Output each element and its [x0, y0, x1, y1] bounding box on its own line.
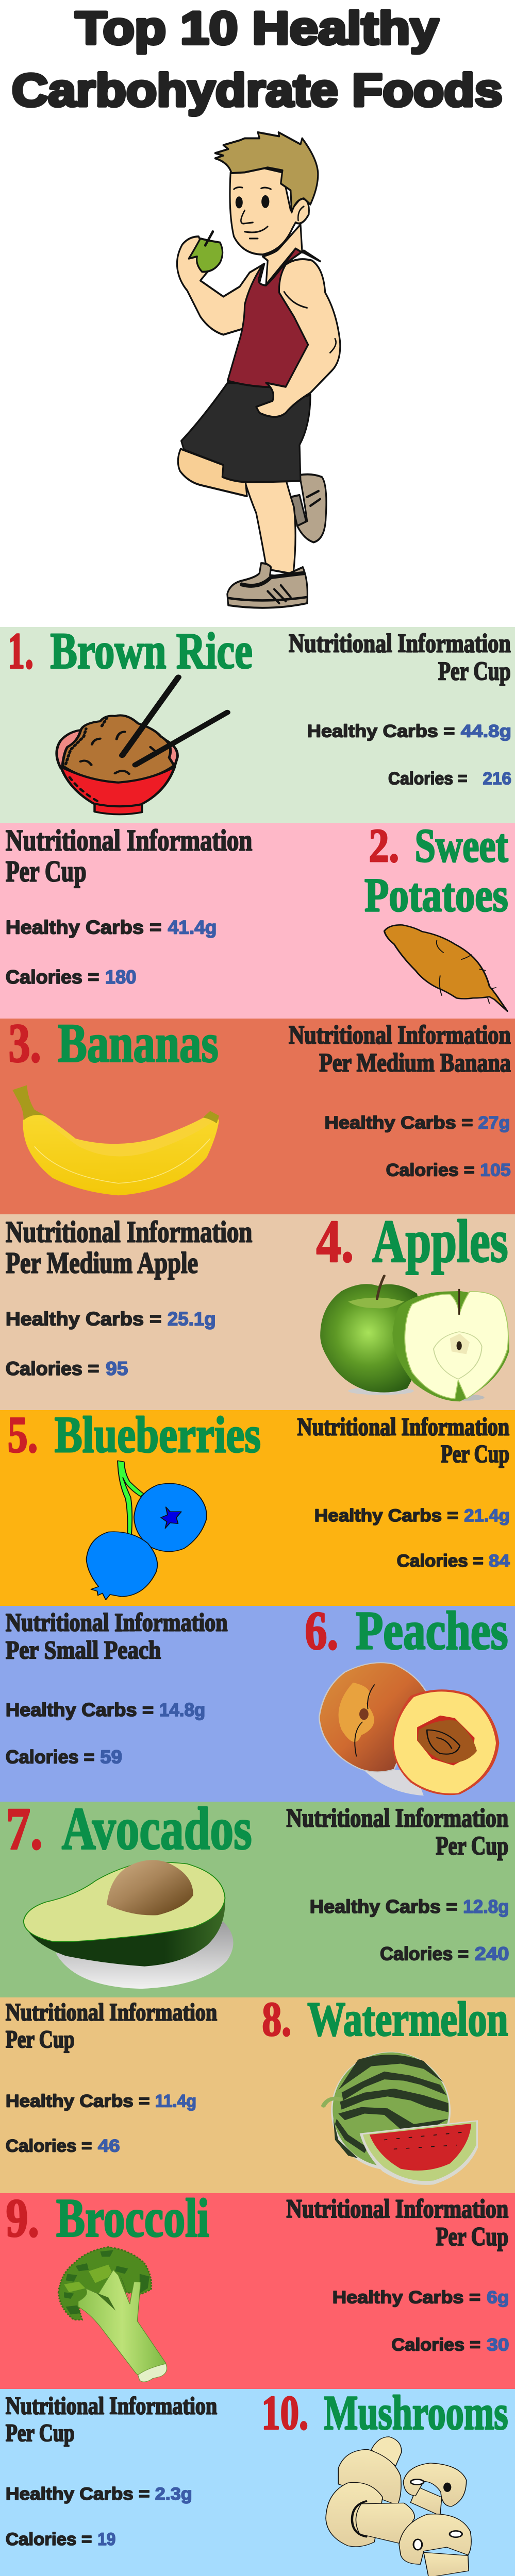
icon: blueberries — [87, 1461, 207, 1600]
heading — [317, 1208, 508, 1275]
nutritional information: Calories = — [6, 2136, 92, 2156]
title: Carbohydrate Foods — [12, 65, 503, 116]
nutritional information — [287, 2195, 509, 2354]
nutritional information: Nutritional Information — [6, 824, 252, 857]
nutritional information — [287, 1804, 509, 1964]
nutritional information: Calories = — [386, 1160, 475, 1180]
panel: header — [12, 3, 503, 608]
nutritional information: Healthy Carbs = — [324, 1113, 473, 1133]
nutritional information: 59 — [100, 1747, 122, 1768]
nutritional information: Nutritional Information — [6, 1215, 252, 1249]
heading — [8, 623, 253, 680]
nutritional information: Calories = — [388, 769, 468, 788]
nutritional information: Healthy Carbs = — [6, 917, 161, 938]
nutritional information: 46 — [98, 2136, 120, 2156]
nutritional information: Nutritional Information — [6, 2392, 217, 2419]
heading: 1. — [8, 623, 34, 680]
nutritional information: Calories = — [391, 2335, 480, 2354]
nutritional information: 2.3g — [155, 2484, 192, 2504]
heading: 8. — [262, 1992, 291, 2046]
heading: 9. — [6, 2188, 39, 2248]
panel: 3 Bananas — [0, 1013, 515, 1214]
nutritional information — [289, 629, 511, 788]
heading: 7. — [6, 1796, 43, 1862]
nutritional information: Calories = — [6, 1747, 94, 1768]
nutritional information: Nutritional Information — [6, 1998, 217, 2026]
nutritional information: Healthy Carbs = — [6, 1308, 161, 1330]
panel: 6 Peaches — [0, 1601, 515, 1802]
icon: avocado half — [24, 1860, 234, 1989]
nutritional information: Calories = — [397, 1551, 484, 1571]
heading: 3. — [9, 1013, 41, 1074]
nutritional information: 41.4g — [168, 917, 217, 938]
panel: 5 Blueberries — [0, 1406, 515, 1606]
heading — [9, 1013, 219, 1074]
heading: Brown Rice — [50, 623, 253, 680]
icon: rice bowl with chopsticks — [57, 677, 227, 815]
heading — [364, 819, 508, 921]
title — [12, 3, 503, 116]
panel: 2 Sweet Potatoes — [0, 819, 515, 1019]
nutritional information: Healthy Carbs = — [314, 1505, 458, 1526]
nutritional information: 11.4g — [155, 2091, 196, 2111]
nutritional information — [6, 1608, 228, 1768]
nutritional information: 25.1g — [168, 1308, 216, 1330]
icon: banana — [12, 1085, 219, 1195]
icon: watermelon and slice — [324, 2052, 478, 2185]
nutritional information: 14.8g — [159, 1700, 205, 1720]
nutritional information: Per Medium Apple — [6, 1246, 198, 1280]
nutritional information: 95 — [106, 1358, 128, 1379]
heading: Bananas — [58, 1013, 219, 1074]
heading — [6, 2188, 209, 2248]
panel: 7 Avocados — [0, 1796, 515, 1997]
heading — [8, 1406, 261, 1463]
illustration: muscular man eating an apple — [177, 132, 340, 608]
heading: Avocados — [62, 1796, 252, 1862]
nutritional information: Calories = — [6, 1358, 99, 1379]
icon: peach and peach half — [319, 1663, 499, 1795]
nutritional information: Per Cup — [6, 855, 87, 888]
nutritional information — [289, 1021, 511, 1180]
heading: 10. — [261, 2386, 308, 2440]
heading: Broccoli — [56, 2188, 209, 2248]
nutritional information: 84 — [489, 1551, 510, 1571]
nutritional information: Per Cup — [6, 2025, 75, 2053]
panel: 4 Apples — [0, 1208, 515, 1410]
nutritional information: 19 — [97, 2529, 115, 2549]
nutritional information — [6, 1215, 252, 1379]
nutritional information — [297, 1413, 510, 1571]
icon: mushrooms — [326, 2437, 471, 2576]
nutritional information: Healthy Carbs = — [307, 721, 455, 741]
panel: 8 Watermelon — [0, 1992, 515, 2193]
heading — [6, 1796, 252, 1862]
nutritional information — [6, 824, 252, 988]
panel: 9 Broccoli — [0, 2188, 515, 2389]
nutritional information: Healthy Carbs = — [310, 1896, 457, 1917]
nutritional information — [6, 2392, 217, 2549]
heading: 2. — [369, 819, 399, 872]
nutritional information: Healthy Carbs = — [6, 2091, 150, 2111]
nutritional information: Healthy Carbs = — [6, 1700, 154, 1720]
nutritional information: 240 — [475, 1943, 509, 1964]
icon: green apple and apple half — [320, 1276, 509, 1401]
nutritional information: Nutritional Information — [6, 1608, 228, 1637]
heading: Blueberries — [55, 1406, 261, 1463]
nutritional information: Calories = — [6, 967, 99, 988]
nutritional information: Healthy Carbs = — [333, 2287, 480, 2308]
nutritional information: Per Cup — [6, 2419, 75, 2447]
nutritional information: 30 — [487, 2335, 509, 2354]
panel: 1 Brown Rice — [0, 623, 515, 823]
nutritional information: 6g — [487, 2287, 509, 2308]
panel: 10 Mushrooms — [0, 2386, 515, 2576]
nutritional information: Calories = — [6, 2529, 92, 2549]
heading: 6. — [305, 1601, 338, 1661]
nutritional information: Calories = — [380, 1943, 469, 1964]
icon: sweet potato — [384, 925, 507, 1011]
heading: 4. — [317, 1208, 354, 1275]
title: Top 10 Healthy — [75, 3, 439, 54]
nutritional information — [6, 1998, 217, 2156]
nutritional information: Healthy Carbs = — [6, 2484, 150, 2504]
icon: broccoli — [58, 2247, 167, 2382]
nutritional information: 180 — [105, 967, 136, 988]
nutritional information: Per Small Peach — [6, 1636, 161, 1664]
heading: 5. — [8, 1406, 38, 1463]
